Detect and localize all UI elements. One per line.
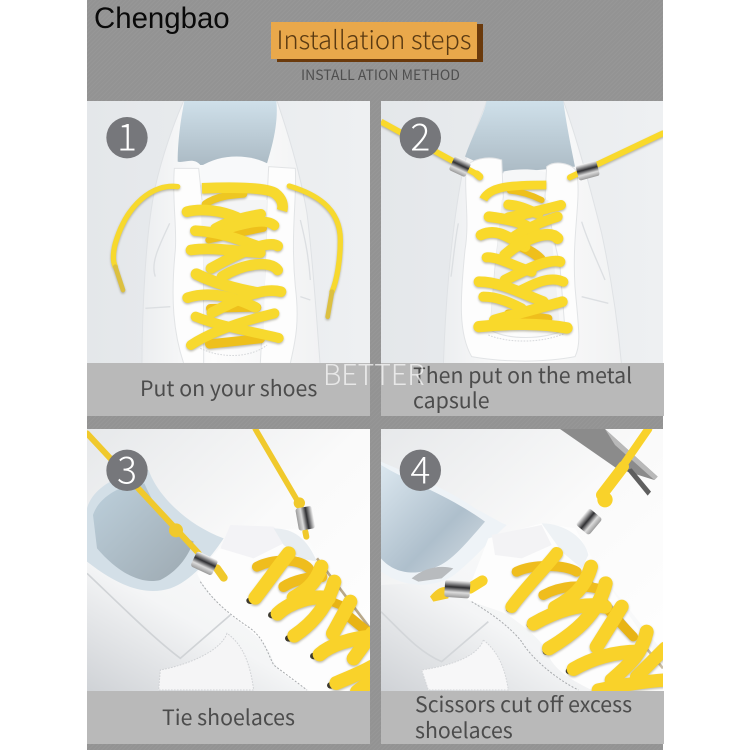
badge: 1: [106, 108, 148, 162]
shoe: front view: [142, 101, 320, 367]
caption: step 1: [87, 363, 370, 416]
eyelets: [506, 606, 574, 674]
metal capsules: [449, 156, 600, 181]
panel: step 3: [87, 429, 370, 744]
panel: step 4: [381, 429, 664, 745]
badge: 4: [400, 440, 441, 494]
caption: step 4: [381, 691, 664, 744]
badge: 2: [400, 108, 441, 162]
caption: step 3: [87, 691, 370, 744]
caption: step 2: [381, 363, 664, 416]
caption: step 2: Then put on the metal: [413, 359, 632, 390]
shoe: front view: [443, 101, 622, 367]
panel: step 2: [381, 101, 664, 416]
laces: yellow crossings: [113, 186, 340, 345]
badge: 4: 4: [410, 440, 430, 494]
badge: 3: 3: [117, 440, 137, 494]
caption: step 2: capsule: [413, 384, 490, 415]
subtitle: INSTALL ATION METHOD: [301, 65, 460, 85]
heading: Installation steps: Installation steps: [277, 20, 471, 57]
badge: 3: [106, 440, 148, 494]
brand name: Chengbao: [94, 2, 230, 35]
shoe: side view: [381, 462, 663, 692]
thin lace with knots and capsules: [430, 429, 648, 602]
laces: yellow crossings: [381, 122, 663, 328]
thin lace with knots and capsules: [87, 429, 316, 578]
caption: step 1: Put on your shoes: [140, 372, 317, 403]
shoe: side view: [87, 470, 370, 692]
watermark: BETTER: BETTER: [323, 353, 425, 394]
caption: step 3: Tie shoelaces: [162, 701, 295, 732]
laces: yellow thick: [255, 553, 372, 692]
laces: yellow thick: [512, 553, 665, 690]
panel: step 1: [87, 101, 370, 416]
caption: step 4: shoelaces: [415, 714, 513, 745]
badge: 1: 1: [117, 108, 137, 162]
eyelets: [246, 597, 335, 689]
scissors: [560, 429, 658, 496]
caption: step 4: Scissors cut off excess: [415, 688, 632, 719]
badge: 2: 2: [410, 108, 430, 162]
